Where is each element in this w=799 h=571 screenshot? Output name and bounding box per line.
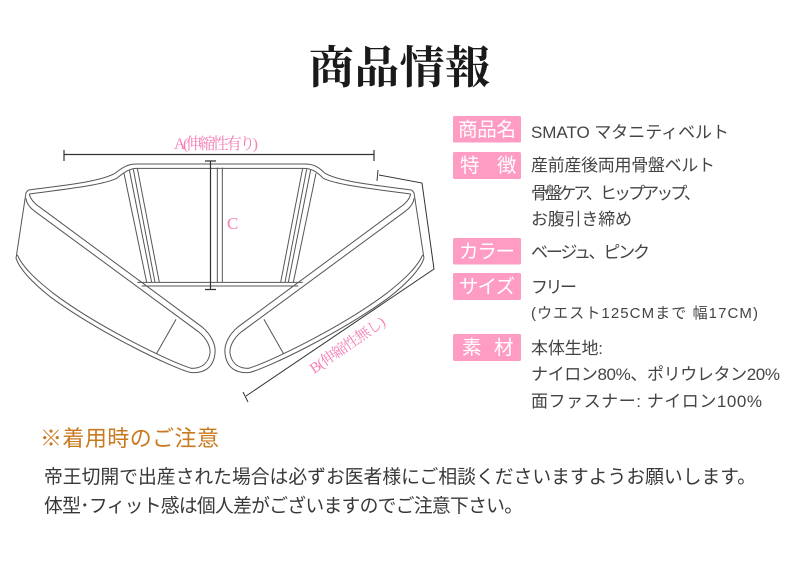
spec row: product name: 商品名 xyxy=(458,119,516,141)
diagram: maternity belt with dimensions xyxy=(16,135,434,402)
spec row: features: 骨盤ケア、ヒップアップ、 xyxy=(531,184,701,203)
spec row: colour: カラー xyxy=(459,241,515,263)
caution text xyxy=(44,466,756,516)
spec row: product name xyxy=(453,116,729,142)
spec row: size: (ウエスト125CMまで 幅17CM) xyxy=(531,305,758,322)
dimension A xyxy=(64,135,374,161)
title: 商品情報 xyxy=(309,43,490,93)
spec row: features: お腹引き締め xyxy=(531,210,632,229)
spec row: colour xyxy=(453,238,650,264)
spec row: material: ナイロン80%、ポリウレタン20% xyxy=(531,365,780,384)
dimension C: C xyxy=(227,214,238,233)
caution heading: ※着用時のご注意 xyxy=(40,426,219,451)
spec row: size: フリー xyxy=(531,278,577,297)
spec row: features: 産前産後両用骨盤ベルト xyxy=(531,156,715,175)
spec row: size: サイズ xyxy=(459,276,515,298)
spec row: product name: SMATO マタニティベルト xyxy=(531,123,729,142)
spec row: features: 徴 xyxy=(497,155,517,177)
left strap xyxy=(16,168,215,373)
belt top edge and central panel xyxy=(28,164,412,286)
spec row: material: 面ファスナー: ナイロン100% xyxy=(531,392,762,411)
right strap xyxy=(225,168,424,373)
spec row: material: 本体生地: xyxy=(531,339,603,358)
spec row: colour: ベージュ、ピンク xyxy=(531,243,650,262)
spec row: size xyxy=(453,273,758,322)
spec row: material: 素 xyxy=(462,337,482,359)
dimension B xyxy=(243,170,434,402)
dimension B: B(伸縮性無し) xyxy=(307,313,389,377)
belt line drawing xyxy=(16,164,424,373)
caution text: 体型･フィット感は個人差がございますのでご注意下さい。 xyxy=(44,494,523,516)
spec row: material xyxy=(453,334,780,411)
dimension A: A(伸縮性有り) xyxy=(174,135,258,153)
spec row: features: 特 xyxy=(460,155,480,177)
spec row: features xyxy=(453,152,715,229)
spec row: material: 材 xyxy=(494,337,514,359)
caution text: 帝王切開で出産された場合は必ずお医者様にご相談くださいますようお願いします。 xyxy=(44,466,756,487)
dimension C xyxy=(205,161,238,290)
